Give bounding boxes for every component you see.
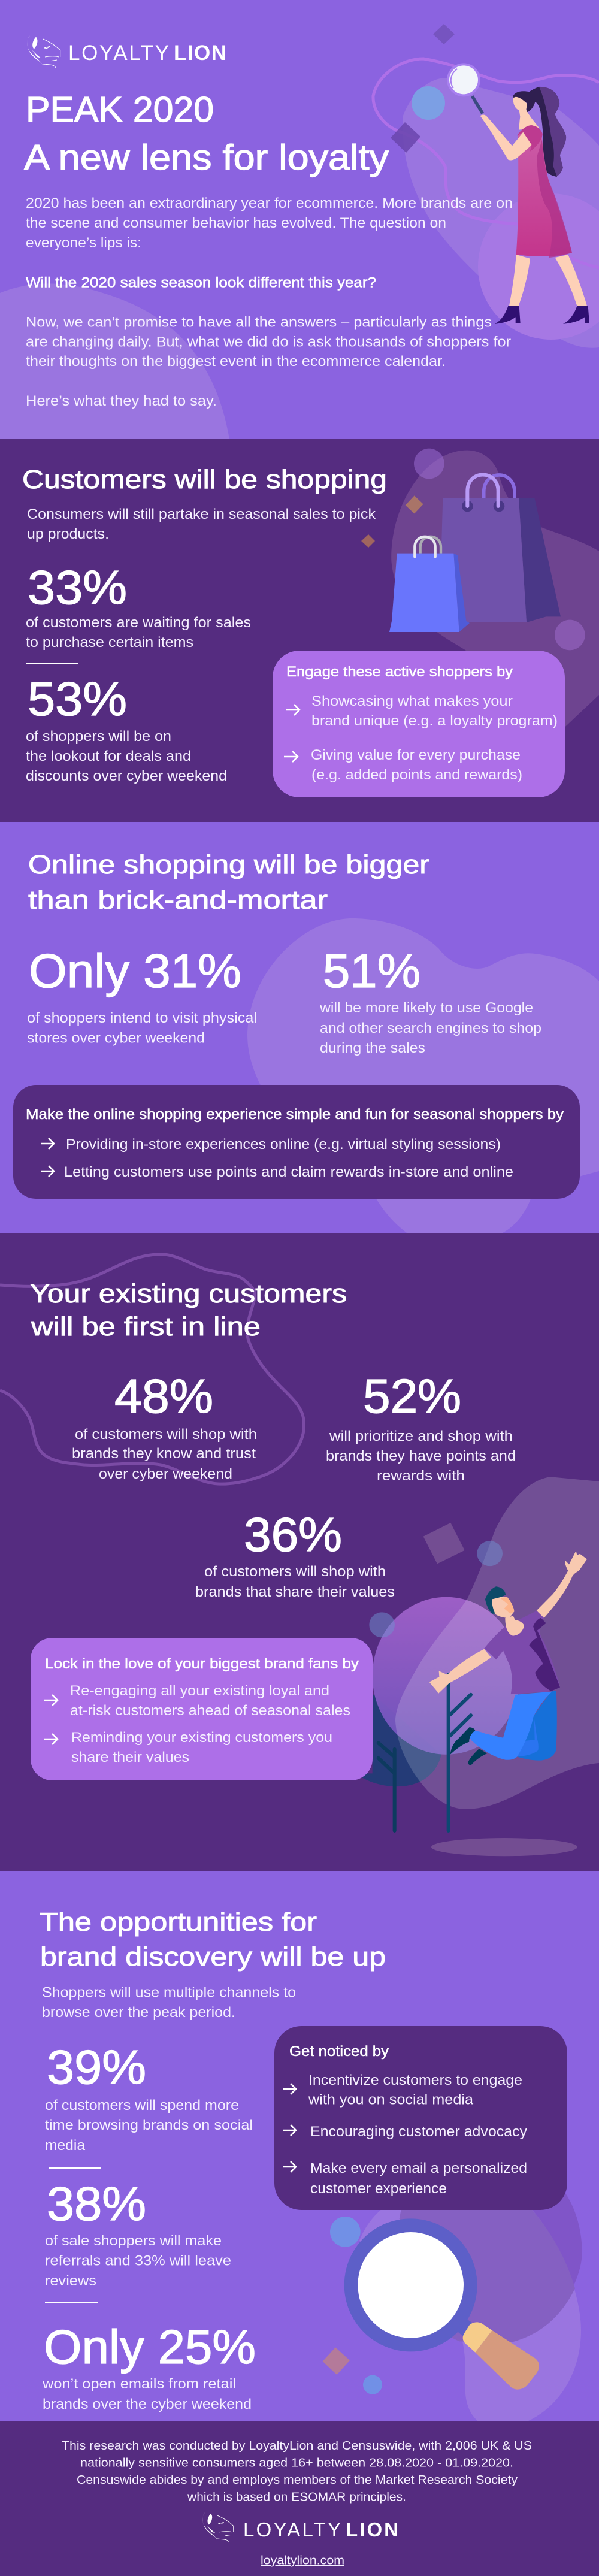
heading: Customers will be shopping <box>22 465 387 494</box>
intro text: up products. <box>27 526 109 542</box>
callout: get noticed: Get noticed by <box>289 2043 389 2060</box>
stat: 48%: brands they know and trust <box>72 1446 256 1462</box>
callout: engage these active shoppers <box>273 651 565 797</box>
purple orb <box>373 1597 520 1755</box>
stat: 38%: 38% <box>47 2177 146 2230</box>
callout: get noticed: with you on social media <box>308 2092 474 2108</box>
stat: 51%: 51% <box>323 944 420 997</box>
text block: methodology: This research was conducted by LoyaltyLion and Censuswide, with 2,006 UK & US <box>62 2439 532 2453</box>
diamond <box>406 495 423 513</box>
stat: 38%: referrals and 33% will leave <box>45 2253 231 2269</box>
stat: 36%: 36% <box>244 1508 342 1561</box>
heading: brand discovery will be up <box>40 1942 386 1972</box>
callout: get noticed: Incentivize customers to engage <box>308 2072 522 2088</box>
arrow <box>41 1166 54 1177</box>
circle: blue <box>412 86 445 120</box>
text block: intro: the scene and consumer behavior has evolved. The question on <box>26 215 446 231</box>
text block: intro: are changing daily. But, what we did do is ask thousands of shoppers for <box>26 334 511 350</box>
illustration: magnifying glass scene <box>323 2193 582 2422</box>
text block: intro <box>26 195 513 409</box>
callout: engage these active shoppers: (e.g. added points and rewards) <box>311 767 522 783</box>
heading: Online shopping will be bigger <box>28 850 429 879</box>
stat: 52% <box>326 1369 516 1484</box>
callout: get noticed: Make every email a personalized <box>310 2160 527 2176</box>
text block: intro: Here’s what they had to say. <box>26 393 217 409</box>
diamond <box>323 2347 350 2375</box>
stat: 39%: media <box>45 2137 86 2154</box>
callout: lock in the love: at-risk customers ahead of seasonal sales <box>70 1703 350 1719</box>
callout: get noticed: customer experience <box>310 2181 447 2197</box>
callout: engage these active shoppers: Showcasing what makes your <box>311 693 513 709</box>
wavy line <box>373 59 599 268</box>
panel: intro <box>0 0 599 439</box>
stat: 36%: brands that share their values <box>195 1584 395 1600</box>
logo <box>27 35 226 68</box>
background blob: overlap <box>400 2206 575 2342</box>
stat: only 31%: of shoppers intend to visit physical <box>27 1010 257 1026</box>
arrow <box>41 1138 54 1149</box>
stat: 51% <box>319 944 541 1056</box>
heading: Your existing customers <box>30 1279 347 1308</box>
illustration: shopping bags <box>389 449 599 729</box>
callout: engage these active shoppers: Giving value for every purchase <box>311 747 521 763</box>
heading <box>40 1907 386 1972</box>
stat: 39%: of customers will spend more <box>45 2097 239 2114</box>
circle: right <box>555 620 585 650</box>
stat: only 25%: Only 25% <box>44 2320 256 2374</box>
circle: blue bottom <box>363 2375 382 2394</box>
background circle: right <box>478 193 599 340</box>
stat: 48%: over cyber weekend <box>99 1466 232 1482</box>
trees <box>449 1675 471 1831</box>
heading: will be first in line <box>31 1312 261 1341</box>
logo: LION <box>174 41 226 65</box>
diamond: middle <box>391 122 420 153</box>
arrow <box>283 2084 296 2094</box>
callout: engage these active shoppers: Engage these active shoppers by <box>286 664 513 680</box>
stat: 38% <box>45 2177 231 2289</box>
panel: footer <box>0 2421 599 2576</box>
panel: brand discovery <box>0 1871 599 2422</box>
wavy line <box>0 1254 304 1484</box>
stat: 48%: of customers will shop with <box>75 1426 257 1443</box>
icon: lion <box>202 2512 234 2542</box>
wordmark: LOYALTY <box>243 2518 341 2541</box>
large bag <box>439 474 561 622</box>
callout: lock in the love: Lock in the love of your biggest brand fans by <box>45 1656 359 1672</box>
stat: 52%: 52% <box>363 1369 461 1423</box>
stat: 52%: rewards with <box>377 1468 465 1484</box>
panel: online shopping <box>0 822 599 1233</box>
arrow <box>283 2161 296 2172</box>
stat: 38%: of sale shoppers will make <box>45 2233 222 2249</box>
logo: LION <box>346 2518 398 2541</box>
stat: 51%: during the sales <box>320 1040 425 1056</box>
blob <box>395 1477 599 1809</box>
callout: lock in the love: share their values <box>71 1749 189 1765</box>
heading <box>28 850 429 915</box>
stat: 48% <box>72 1369 257 1482</box>
stat: 53%: discounts over cyber weekend <box>26 768 227 784</box>
stat: 51%: and other search engines to shop <box>320 1020 541 1036</box>
stat: 52%: brands they have points and <box>326 1448 516 1464</box>
callout: lock in the love: Reminding your existing customers you <box>71 1730 332 1746</box>
stat: only 25% <box>42 2320 256 2412</box>
icon: lion <box>27 35 60 68</box>
text block: intro: Will the 2020 sales season look different this year? <box>26 274 376 291</box>
stat: 33%: of customers are waiting for sales <box>26 615 251 631</box>
callout: lock in the love: Re-engaging all your existing loyal and <box>70 1683 329 1699</box>
callout: make online shopping simple: Providing in-store experiences online (e.g. virtual styling sessions) <box>66 1136 501 1153</box>
square <box>423 1523 465 1564</box>
man <box>517 1691 557 1761</box>
stat: 51%: will be more likely to use Google <box>319 1000 533 1016</box>
title <box>24 90 389 177</box>
callout: engage these active shoppers: brand unique (e.g. a loyalty program) <box>311 713 558 729</box>
illustration: jumping man <box>355 1477 599 1856</box>
intro text: Consumers will still partake in seasonal sales to pick <box>27 506 376 522</box>
link: loyaltylion.com <box>261 2554 344 2568</box>
stat: 53%: the lookout for deals and <box>26 748 191 764</box>
stat: 39% <box>45 2040 253 2154</box>
stat: 38%: reviews <box>45 2273 96 2289</box>
circle: top <box>414 449 444 479</box>
shadow <box>431 1838 577 1856</box>
stat: 48%: 48% <box>114 1369 213 1423</box>
logo <box>202 2512 398 2542</box>
stat: 39%: 39% <box>47 2040 146 2094</box>
stat: 52%: will prioritize and shop with <box>329 1428 513 1444</box>
text block: intro: 2020 has been an extraordinary year for ecommerce. More brands are on <box>26 195 513 211</box>
background blob <box>391 451 599 729</box>
arrow <box>44 1734 58 1744</box>
background blob: light <box>359 2205 581 2422</box>
arrow <box>44 1695 58 1706</box>
heading: than brick-and-mortar <box>28 885 328 915</box>
title: A new lens for loyalty <box>24 138 389 177</box>
stat: only 25%: brands over the cyber weekend <box>43 2396 252 2412</box>
callout: make online shopping simple: Letting customers use points and claim rewards in-store and online <box>64 1164 513 1180</box>
stat: 33% <box>26 561 251 651</box>
stat: 39%: time browsing brands on social <box>45 2117 253 2133</box>
panel: customers will be shopping <box>0 439 599 822</box>
stat: only 25%: won’t open emails from retail <box>42 2376 236 2392</box>
callout: get noticed <box>274 2026 567 2210</box>
stat: only 31%: Only 31% <box>29 944 241 997</box>
background blob <box>247 918 599 1233</box>
callout: make online shopping simple <box>13 1085 580 1199</box>
callout: get noticed: Encouraging customer advocacy <box>310 2124 527 2140</box>
text block: intro: Now, we can’t promise to have all the answers – particularly as things <box>26 314 492 331</box>
circle: blue top <box>330 2217 361 2247</box>
stat: 53%: of shoppers will be on <box>26 728 171 745</box>
callout: make online shopping simple: Make the online shopping experience simple and fun for seasonal shoppers by <box>26 1106 564 1123</box>
stat: only 31% <box>27 944 257 1046</box>
background blob: dark outer <box>400 2193 582 2342</box>
stat: 53% <box>26 672 227 784</box>
stat: 36% <box>195 1508 395 1600</box>
arrow <box>284 751 298 762</box>
intro text <box>42 1984 296 2021</box>
text block: methodology: nationally sensitive consumers aged 16+ between 28.08.2020 - 01.09.2020. <box>80 2456 513 2469</box>
intro text <box>27 506 376 542</box>
dark tree crown <box>355 1694 441 1786</box>
panel: existing customers <box>0 1233 599 1871</box>
stat: 36%: of customers will shop with <box>204 1564 386 1580</box>
diamond: top <box>433 24 455 44</box>
heading <box>30 1279 347 1341</box>
background blob: right <box>403 78 599 348</box>
text block: methodology <box>62 2439 532 2504</box>
arrow <box>283 2125 296 2136</box>
stat: 33%: to purchase certain items <box>26 634 193 651</box>
small bag <box>389 537 470 632</box>
illustration: woman with magnifying glass <box>447 63 589 324</box>
callout: lock in the love <box>31 1638 373 1780</box>
text block: intro: their thoughts on the biggest event in the ecommerce calendar. <box>26 353 446 370</box>
small circles <box>477 1541 503 1566</box>
intro text: browse over the peak period. <box>42 2004 235 2021</box>
stat: 53%: 53% <box>28 672 127 725</box>
intro text: Shoppers will use multiple channels to <box>42 1984 296 2001</box>
background blob: lower left <box>0 283 229 439</box>
heading: The opportunities for <box>40 1907 317 1937</box>
text block: methodology: Censuswide abides by and employs members of the Market Research Society <box>77 2474 518 2487</box>
stat: 33%: 33% <box>28 561 127 614</box>
title: PEAK 2020 <box>26 90 214 129</box>
stat: only 31%: stores over cyber weekend <box>27 1030 205 1046</box>
arrow <box>286 705 300 715</box>
icon: magnifying glass <box>344 2218 539 2390</box>
text block: intro: everyone’s lips is: <box>26 235 141 251</box>
wordmark: LOYALTY <box>68 41 169 65</box>
diamond: small <box>361 534 375 548</box>
text block: methodology: which is based on ESOMAR principles. <box>187 2491 406 2504</box>
